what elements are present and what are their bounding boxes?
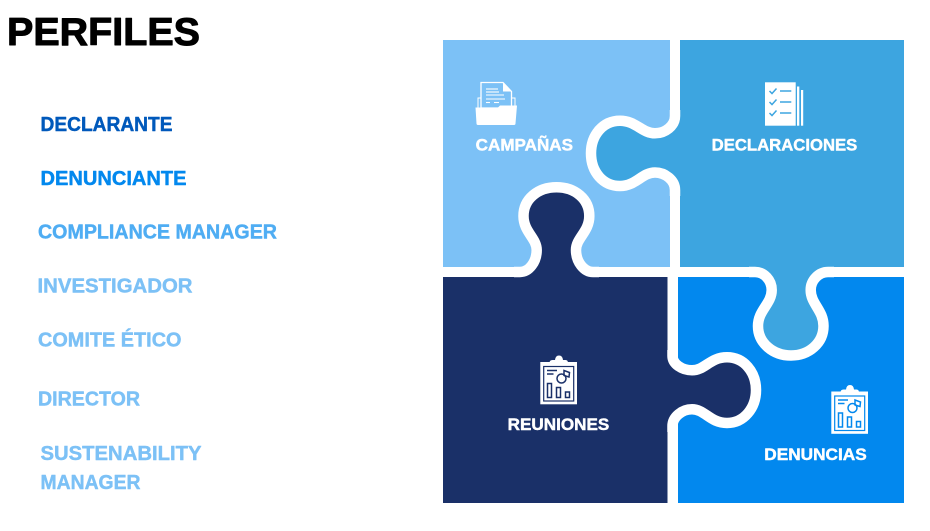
label: reuniones: REUNIONES (508, 416, 609, 434)
profile: denunciante: DENUNCIANTE (40, 168, 186, 190)
icon: checklist (765, 82, 803, 126)
puzzle (443, 40, 904, 503)
icon: clipboard report, denuncias (831, 385, 868, 434)
piece: campañas (443, 40, 670, 267)
icon: folder with document (476, 82, 517, 125)
piece: reuniones (443, 277, 668, 503)
tab: declaraciones into campañas (591, 116, 682, 190)
profile: sustenability manager: MANAGER (40, 472, 141, 494)
profile: sustenability manager: SUSTENABILITY (40, 443, 202, 465)
profile: comite etico: COMITE ÉTICO (38, 329, 182, 352)
label: campañas: CAMPAÑAS (476, 135, 573, 155)
profile: declarante: DECLARANTE (40, 114, 172, 136)
profile: sustenability manager (40, 443, 202, 494)
tab: reuniones into campañas (520, 187, 593, 279)
profile: investigador: INVESTIGADOR (38, 276, 193, 298)
label: declaraciones: DECLARACIONES (712, 137, 857, 155)
piece: denuncias (678, 277, 904, 503)
label: denuncias: DENUNCIAS (764, 446, 867, 464)
profile: director: DIRECTOR (38, 389, 141, 411)
tab: declaraciones into denuncias (755, 265, 828, 356)
title: PERFILES (7, 11, 200, 54)
piece: declaraciones (680, 40, 904, 267)
profile list (38, 114, 278, 494)
tab: reuniones into denuncias (665, 356, 756, 426)
icon: clipboard report, reuniones (540, 356, 577, 404)
profile: compliance manager: COMPLIANCE MANAGER (38, 222, 278, 244)
